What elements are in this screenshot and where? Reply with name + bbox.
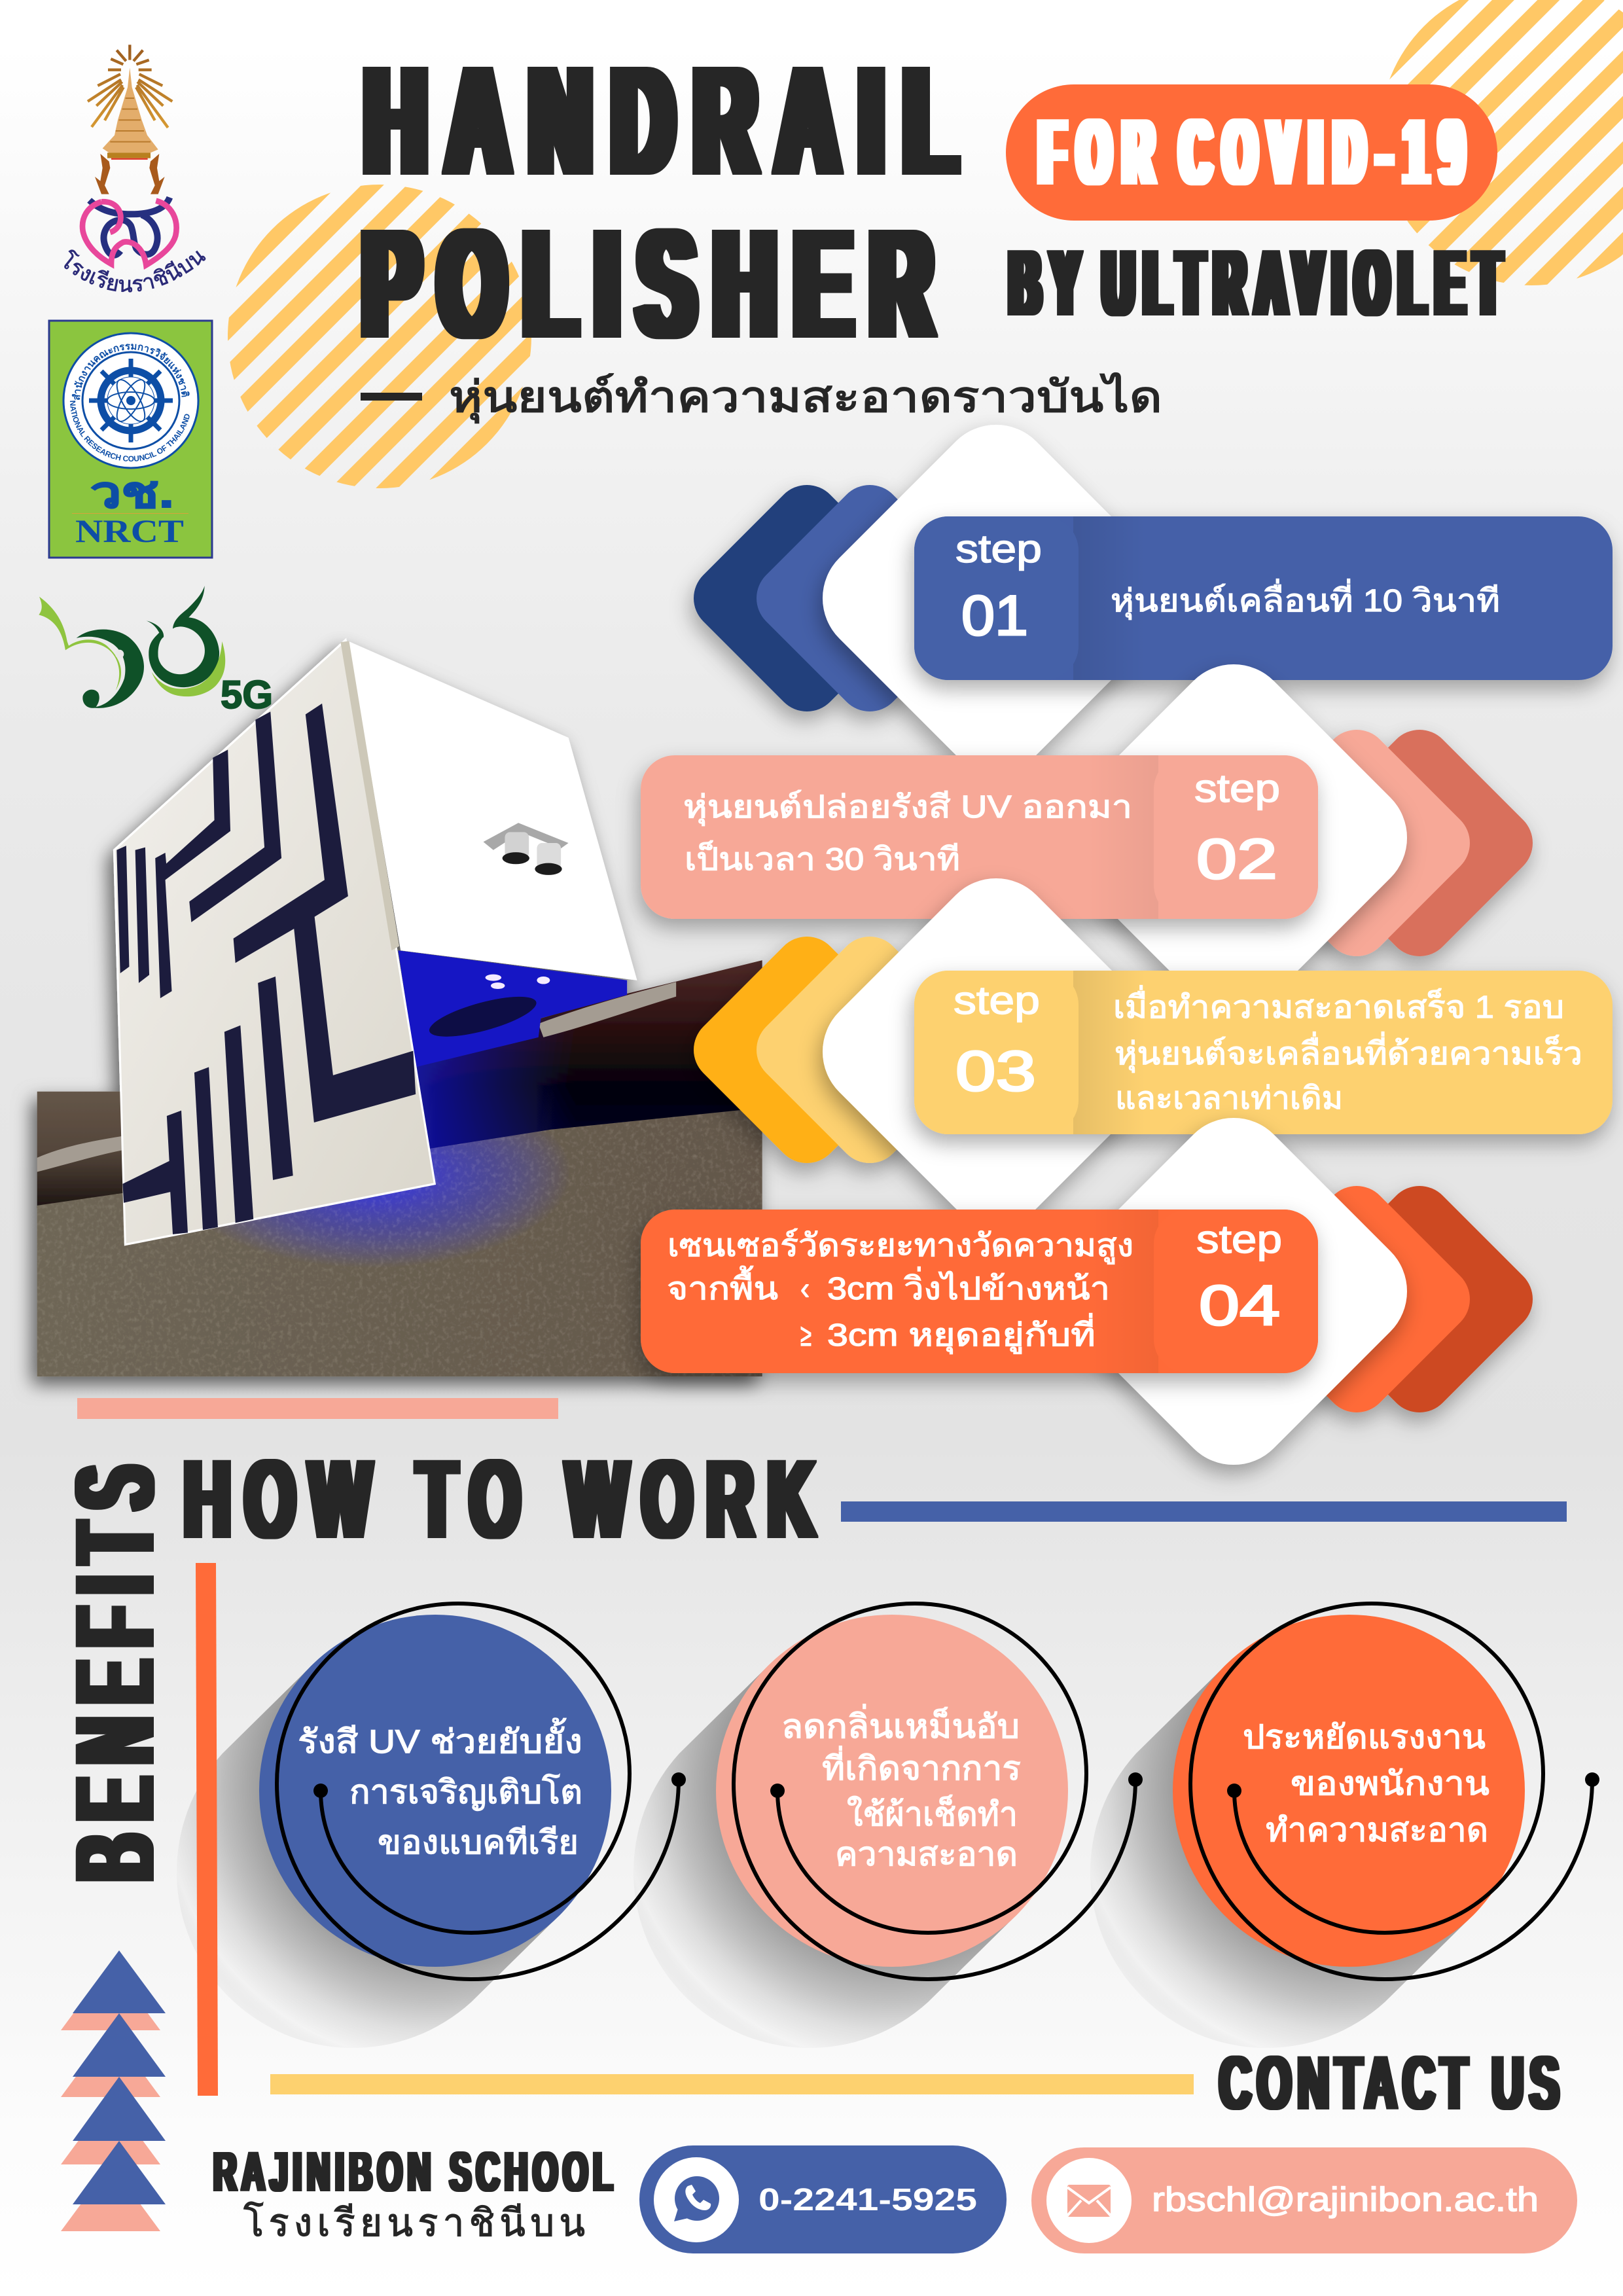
- badge: for covid-19: [1006, 84, 1497, 221]
- striped circle left: [228, 185, 531, 488]
- description step 4: 3cm วิ่งไปข้างหน้า: [827, 1266, 1110, 1306]
- heading: benefits (vertical): BENEFITS: [54, 1452, 177, 1881]
- description step 4: จากพื้น: [667, 1266, 778, 1306]
- number 01: 01: [961, 584, 1028, 647]
- white diamond step 2: [1117, 721, 1350, 954]
- logo: nrct: สำนักงานคณะกรรมการวิจัยแห่งชาติ: [72, 344, 190, 400]
- description step 3: และเวลาเท่าเดิม: [1115, 1081, 1343, 1116]
- text 1: การเจริญเติบโต: [349, 1774, 582, 1810]
- text 2: ที่เกิดจากการ: [822, 1746, 1021, 1787]
- text 2: ใช้ผ้าเช็ดทำ: [847, 1795, 1018, 1833]
- dark cavity: [426, 988, 539, 1045]
- long shadow 3: [1090, 1666, 1473, 2048]
- text 2: ลดกลิ่นเหม็นอับ: [781, 1704, 1020, 1745]
- long shadow 1: [177, 1666, 560, 2048]
- step 1 group: [726, 482, 1613, 715]
- chevrons step 1: [726, 518, 950, 679]
- disc 1: [259, 1615, 611, 1967]
- triangles decoration: [61, 1950, 166, 2231]
- chevrons step 2: [1276, 762, 1500, 924]
- logo: 50 years 5g: [39, 586, 273, 717]
- disc 2: [716, 1615, 1068, 1967]
- benefit circle 3: [1090, 1604, 1599, 2048]
- bar step 4: [641, 1210, 1318, 1373]
- navy knot: [90, 198, 169, 255]
- number 03: 03: [955, 1040, 1036, 1103]
- blue rule: [841, 1501, 1567, 1522]
- logo: school emblem: [64, 45, 205, 293]
- logo: 50 years 5g: 5G: [221, 673, 273, 717]
- by ultraviolet heading: BY ULTRAVIOLET: [1010, 232, 1512, 335]
- number box step 1: [914, 516, 1079, 680]
- logo: school emblem: โรงเรียนราชินีบน: [64, 249, 205, 293]
- description step 2: หุ่นยนต์ปล่อยรังสี UV ออกมา: [683, 790, 1132, 826]
- white diamond step 3: [880, 935, 1113, 1168]
- label step 2: step: [1194, 766, 1280, 810]
- ultrasonic sensor: [484, 823, 569, 875]
- rail highlight: [37, 982, 676, 1172]
- icon: envelope: [1067, 2185, 1111, 2217]
- led dots: [486, 975, 550, 989]
- wall blue glow: [37, 1111, 762, 1376]
- text 3: ประหยัดแรงงาน: [1243, 1719, 1486, 1755]
- step 2 group: [641, 721, 1500, 954]
- number box step 3: [914, 971, 1079, 1134]
- description step 3: เมื่อทำความสะอาดเสร็จ 1 รอบ: [1113, 985, 1564, 1025]
- step 3 group: [726, 935, 1613, 1168]
- rail left: [37, 1092, 125, 1208]
- robot front panel: [114, 640, 435, 1245]
- chevrons step 3: [726, 969, 950, 1130]
- number 04: 04: [1199, 1274, 1280, 1337]
- logo: nrct: NRCT: [75, 512, 184, 549]
- golden rays: [88, 45, 172, 128]
- heading: how to work: HOW TO WORK: [184, 1438, 829, 1561]
- icon: phone bubble: [674, 2176, 719, 2221]
- yellow rule: [270, 2074, 1194, 2094]
- description step 2: เป็นเวลา 30 วินาที: [685, 840, 960, 877]
- striped circle right: [1380, 0, 1623, 285]
- panel fold: [340, 641, 399, 950]
- text 1: [298, 1718, 582, 1861]
- label step 1: step: [955, 527, 1042, 571]
- text 2: [781, 1704, 1021, 1873]
- heading: contact us: CONTACT US: [1219, 2041, 1565, 2125]
- label step 3: step: [954, 978, 1040, 1022]
- title: polisher: POLISHER: [363, 199, 952, 370]
- logo: nrct: NATIONAL RESEARCH COUNCIL OF THAILAND: [69, 401, 190, 462]
- description step 4: ‹: [800, 1272, 810, 1306]
- text 1: ของแบคทีเรีย: [378, 1824, 579, 1861]
- logo: nrct: วช.: [90, 468, 174, 516]
- step 4 group: [641, 1175, 1500, 1408]
- robot side panel: [348, 641, 637, 980]
- bar step 3: [914, 971, 1613, 1134]
- white diamond step 1: [880, 482, 1113, 715]
- school name: [213, 2141, 618, 2244]
- orange vertical bar: [196, 1563, 218, 2096]
- email pill: rbschl@rajinibon.ac.th: [1152, 2181, 1539, 2219]
- description step 4: [667, 1229, 1133, 1354]
- email pill: [1031, 2147, 1577, 2253]
- logo: nrct: [49, 321, 212, 558]
- phone pill: [639, 2145, 1007, 2253]
- school name: โรงเรียนราชินีบน: [243, 2201, 585, 2244]
- rail blue tint: [401, 1010, 576, 1151]
- phone pill: 0-2241-5925: [758, 2183, 977, 2217]
- description step 1: หุ่นยนต์เคลื่อนที่ 10 วินาที: [1111, 579, 1500, 620]
- subtitle thai: หุ่นยนต์ทำความสะอาดราวบันได: [449, 372, 1162, 423]
- text 2: ความสะอาด: [835, 1836, 1018, 1873]
- spiral ring 2: [734, 1604, 1143, 1979]
- blue underside: [398, 950, 627, 1067]
- number box step 2: [1154, 755, 1318, 919]
- text 3: [1243, 1719, 1489, 1848]
- long shadow 2: [633, 1666, 1016, 2048]
- number box step 4: [1154, 1210, 1318, 1373]
- disc 3: [1173, 1615, 1525, 1967]
- chevrons step 4: [1276, 1219, 1500, 1380]
- badge: for covid-19: FOR COVID-19: [1039, 101, 1476, 204]
- benefit circle 1: [259, 1604, 686, 1979]
- subtitle dash: [361, 393, 422, 401]
- wall: [37, 1108, 762, 1376]
- description step 4: เซนเซอร์วัดระยะทางวัดความสูง: [668, 1229, 1133, 1265]
- description step 3: [1113, 985, 1582, 1116]
- text 1: รังสี UV ช่วยยับยั้ง: [298, 1718, 582, 1760]
- text 3: ทำความสะอาด: [1266, 1812, 1488, 1848]
- pink knot: [82, 201, 177, 265]
- white diamond step 4: [1117, 1175, 1350, 1408]
- text 3: ของพนักงาน: [1291, 1765, 1489, 1802]
- bar step 2: [641, 755, 1318, 919]
- title: handrail: HANDRAIL: [365, 36, 977, 207]
- bar step 1: [914, 516, 1613, 680]
- spiral ring 1: [277, 1604, 686, 1979]
- description step 4: 3cm หยุดอยู่กับที่: [827, 1313, 1096, 1354]
- salmon bar under photo: [77, 1398, 558, 1419]
- school name: RAJINIBON SCHOOL: [213, 2141, 618, 2202]
- number 02: 02: [1196, 828, 1277, 891]
- label step 4: step: [1196, 1217, 1282, 1261]
- description step 3: หุ่นยนต์จะเคลื่อนที่ด้วยความเร็ว: [1115, 1031, 1582, 1073]
- photo: robot on handrail: [37, 640, 762, 1376]
- rail right: [401, 960, 762, 1154]
- description step 4: ≥: [800, 1318, 812, 1353]
- spiral ring 3: [1190, 1604, 1599, 1979]
- benefit circle 2: [633, 1604, 1143, 2048]
- description step 2: [683, 790, 1132, 877]
- front panel maze pattern: [116, 704, 416, 1234]
